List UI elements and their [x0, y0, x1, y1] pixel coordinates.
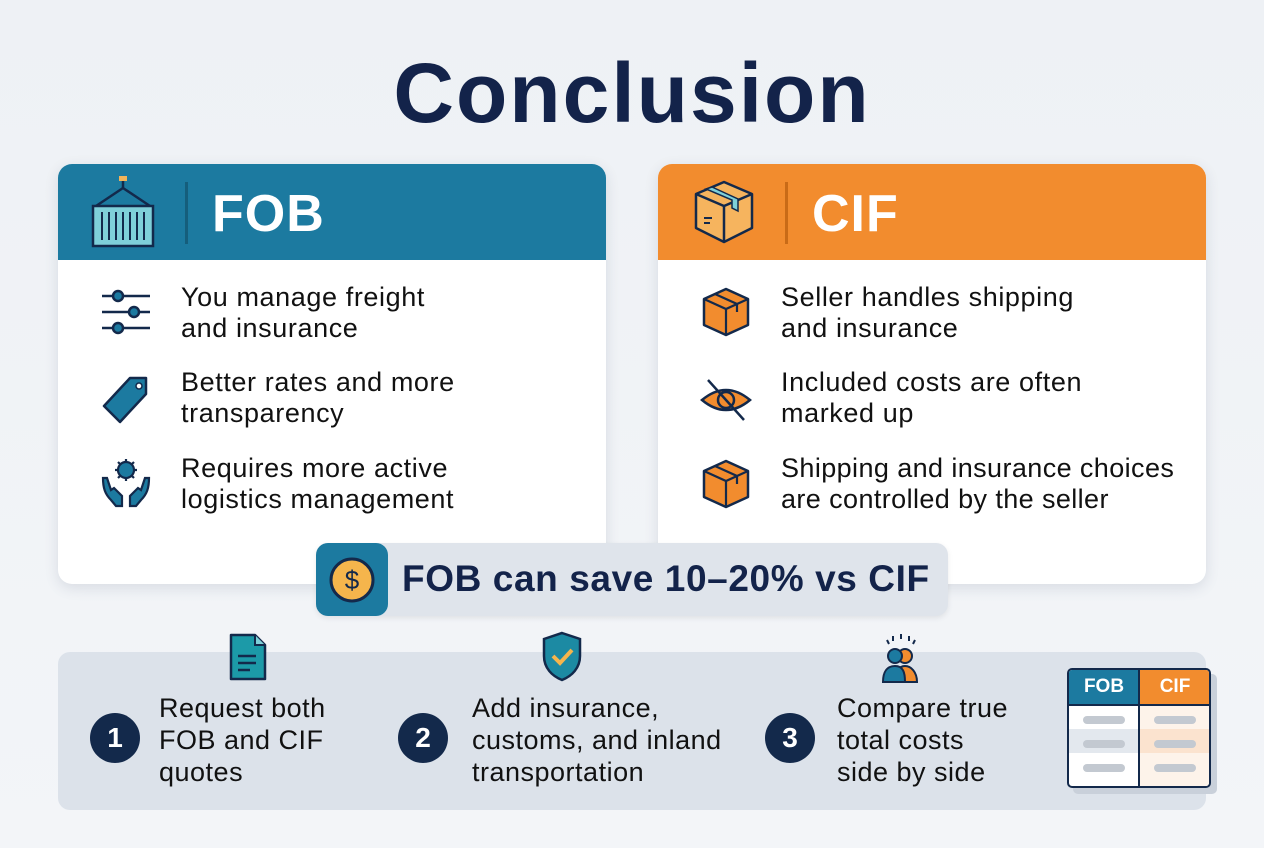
icon: comparison table: FOB	[1084, 676, 1124, 697]
CIF header	[658, 164, 1206, 260]
CIF header: CIF	[812, 185, 899, 243]
panel: FOB: Better rates and more	[181, 367, 455, 397]
FOB item 3	[102, 453, 454, 514]
step 3	[765, 634, 1008, 787]
title: Conclusion	[393, 46, 871, 140]
icon: box	[694, 180, 754, 244]
panel: FOB: logistics management	[181, 484, 454, 514]
step 1: quotes	[159, 757, 243, 787]
panel: FOB: Requires more active	[181, 453, 448, 483]
callout: savings: FOB can save 10–20% vs CIF	[402, 558, 930, 599]
step 1: FOB and CIF	[159, 725, 324, 755]
CIF item 2	[700, 367, 1082, 428]
panel: CIF: are controlled by the seller	[781, 484, 1109, 514]
icon: container	[92, 176, 154, 248]
icon: comparison table	[1067, 668, 1211, 788]
step 3: 3	[782, 722, 798, 753]
callout: savings	[316, 543, 948, 616]
FOB item 2	[102, 367, 455, 428]
panel: CIF: Shipping and insurance choices	[781, 453, 1174, 483]
FOB item 1	[102, 282, 425, 343]
step 3: Compare true	[837, 693, 1008, 723]
step 2: transportation	[472, 757, 644, 787]
panel: FOB: You manage freight	[181, 282, 425, 312]
panel: FOB: transparency	[181, 398, 344, 428]
icon: dollar coin: $	[345, 565, 360, 595]
CIF item 1	[702, 282, 1074, 343]
panel: FOB: and insurance	[181, 313, 358, 343]
panel: CIF	[658, 164, 1206, 584]
panel: FOB	[58, 164, 606, 584]
CIF item 3	[702, 453, 1174, 514]
panel: CIF: Seller handles shipping	[781, 282, 1074, 312]
step 1: Request both	[159, 693, 326, 723]
panel: CIF: and insurance	[781, 313, 958, 343]
panel: CIF: marked up	[781, 398, 914, 428]
FOB header: FOB	[212, 185, 325, 243]
icon: dollar coin	[316, 543, 388, 616]
step 3: side by side	[837, 757, 986, 787]
bottom steps panel	[58, 652, 1206, 810]
step 2	[398, 632, 722, 787]
step 2: Add insurance,	[472, 693, 659, 723]
step 2: customs, and inland	[472, 725, 722, 755]
icon: people	[882, 634, 918, 683]
step 1	[90, 634, 326, 787]
panel: CIF: Included costs are often	[781, 367, 1082, 397]
FOB header	[58, 164, 606, 260]
step 3: total costs	[837, 725, 964, 755]
step 1: 1	[107, 722, 123, 753]
icon: shield	[542, 632, 582, 682]
icon: document	[230, 634, 266, 680]
icon: comparison table: CIF	[1160, 676, 1190, 697]
step 2: 2	[415, 722, 431, 753]
